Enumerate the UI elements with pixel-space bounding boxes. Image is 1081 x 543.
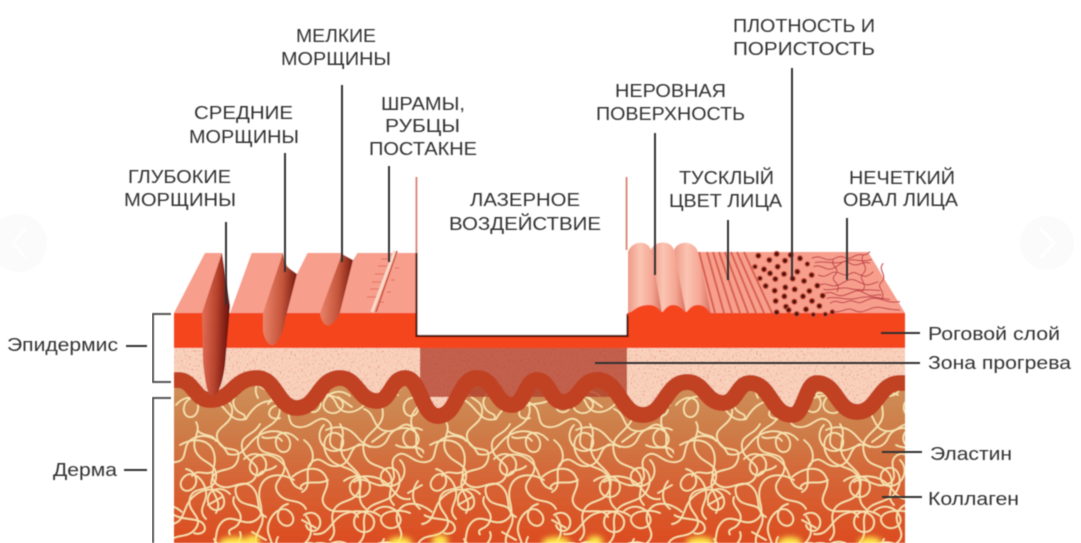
label: uneven surface: ПОВЕРХНОСТЬ xyxy=(596,104,745,124)
label: deep wrinkles: ГЛУБОКИЕ xyxy=(128,167,231,187)
label: scars: РУБЦЫ xyxy=(385,116,460,136)
label: blurred oval: НЕЧЕТКИЙ xyxy=(849,167,955,188)
label: density and porosity: ПЛОТНОСТЬ И xyxy=(733,16,875,36)
label: fine wrinkles: МОРЩИНЫ xyxy=(281,49,391,69)
scar xyxy=(367,251,399,312)
label: blurred oval xyxy=(843,167,958,210)
dermis layer with fibers xyxy=(173,385,906,543)
label: deep wrinkles: МОРЩИНЫ xyxy=(124,190,236,210)
label: deep wrinkles xyxy=(124,167,236,210)
label: elastin: Эластин xyxy=(930,444,1012,464)
wrinkle notches (white gaps) xyxy=(222,252,358,313)
laser treatment window xyxy=(416,177,628,336)
label: laser treatment: ЛАЗЕРНОЕ xyxy=(470,190,580,210)
label: scars: ШРАМЫ, xyxy=(381,94,465,114)
label: heating zone: Зона прогрева xyxy=(928,353,1072,373)
label: dull complexion: ЦВЕТ ЛИЦА xyxy=(669,191,782,211)
uneven surface ridges xyxy=(628,242,711,316)
bracket: epidermis xyxy=(153,314,171,382)
label: fine wrinkles xyxy=(281,26,391,69)
label: laser treatment xyxy=(449,190,601,234)
epidermis pink speckled layer xyxy=(173,347,906,409)
carousel button: previous xyxy=(0,214,47,272)
label: scars: ПОСТАКНЕ xyxy=(369,139,477,159)
blurred oval contour lines xyxy=(812,252,900,312)
label: blurred oval: ОВАЛ ЛИЦА xyxy=(843,190,958,210)
label: density and porosity: ПОРИСТОСТЬ xyxy=(733,39,875,59)
deep wrinkle xyxy=(202,253,230,396)
label: uneven surface: НЕРОВНАЯ xyxy=(615,81,726,101)
label: medium wrinkles: СРЕДНИЕ xyxy=(194,103,293,123)
label: dull complexion xyxy=(669,167,782,211)
pores dots xyxy=(753,251,835,317)
label: density and porosity xyxy=(733,16,875,59)
heat zone xyxy=(420,348,627,397)
label: uneven surface xyxy=(596,81,745,124)
label: dull complexion: ТУСКЛЫЙ xyxy=(679,167,774,188)
stratum corneum xyxy=(174,313,905,348)
dull tone stripes xyxy=(699,252,772,313)
label: epidermis: Эпидермис xyxy=(7,335,118,355)
basal wavy membrane xyxy=(158,378,915,416)
medium wrinkle xyxy=(263,253,297,345)
label: fine wrinkles: МЕЛКИЕ xyxy=(296,26,376,46)
skin diagram xyxy=(158,177,915,543)
label: medium wrinkles: МОРЩИНЫ xyxy=(189,127,299,147)
label: laser treatment: ВОЗДЕЙСТВИЕ xyxy=(449,213,601,234)
fine wrinkle xyxy=(320,254,353,325)
carousel button: next xyxy=(1020,216,1074,270)
label: stratum corneum: Роговой слой xyxy=(928,324,1060,344)
label: scars xyxy=(369,94,477,159)
skin surface base xyxy=(174,252,905,313)
label: medium wrinkles xyxy=(189,103,299,147)
label: collagen: Коллаген xyxy=(928,489,1019,509)
bracket: dermis xyxy=(153,398,171,543)
leader lines xyxy=(124,68,922,497)
label: dermis: Дерма xyxy=(53,460,118,480)
